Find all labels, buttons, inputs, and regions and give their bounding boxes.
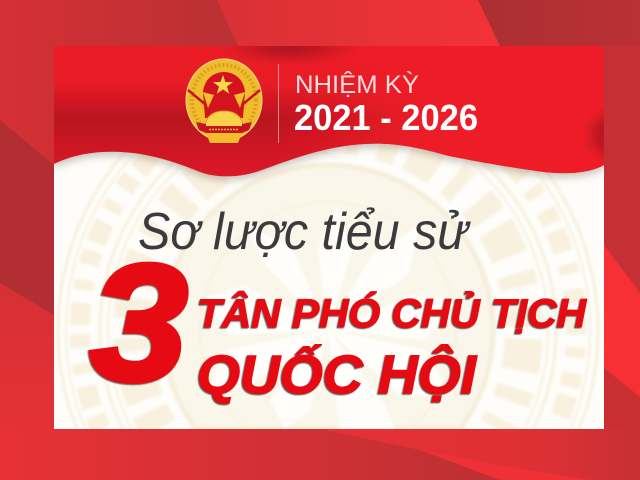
- divider: [278, 64, 279, 143]
- emblem star: [213, 75, 233, 94]
- emblem red field: [203, 72, 245, 118]
- panel: content card: [54, 46, 604, 458]
- drum star rays: [198, 205, 458, 429]
- emblem gold disc: [186, 59, 262, 143]
- emblem ribbon: [196, 122, 252, 133]
- drum central disc: [163, 165, 493, 429]
- emblem side stripes: [188, 90, 260, 105]
- emblem gear: [205, 111, 243, 127]
- bronze drum watermark: [56, 144, 600, 429]
- heading: Sơ lược tiểu sử: Sơ lược tiểu sử: [138, 203, 471, 261]
- icon: national emblem of Vietnam: [186, 59, 262, 143]
- heading: QUỐC HỘI: QUỐC HỘI: [197, 344, 477, 405]
- heading: big number 3: 3: [90, 231, 188, 416]
- text: term label: NHIỆM KỲ: [295, 70, 419, 99]
- text: term years: 2021 - 2026: [294, 97, 478, 138]
- header wave band: [54, 46, 604, 176]
- emblem inner gold corners: [203, 92, 245, 108]
- heading: TÂN PHÓ CHỦ TỊCH: TÂN PHÓ CHỦ TỊCH: [197, 290, 587, 336]
- wave shading: [220, 46, 604, 173]
